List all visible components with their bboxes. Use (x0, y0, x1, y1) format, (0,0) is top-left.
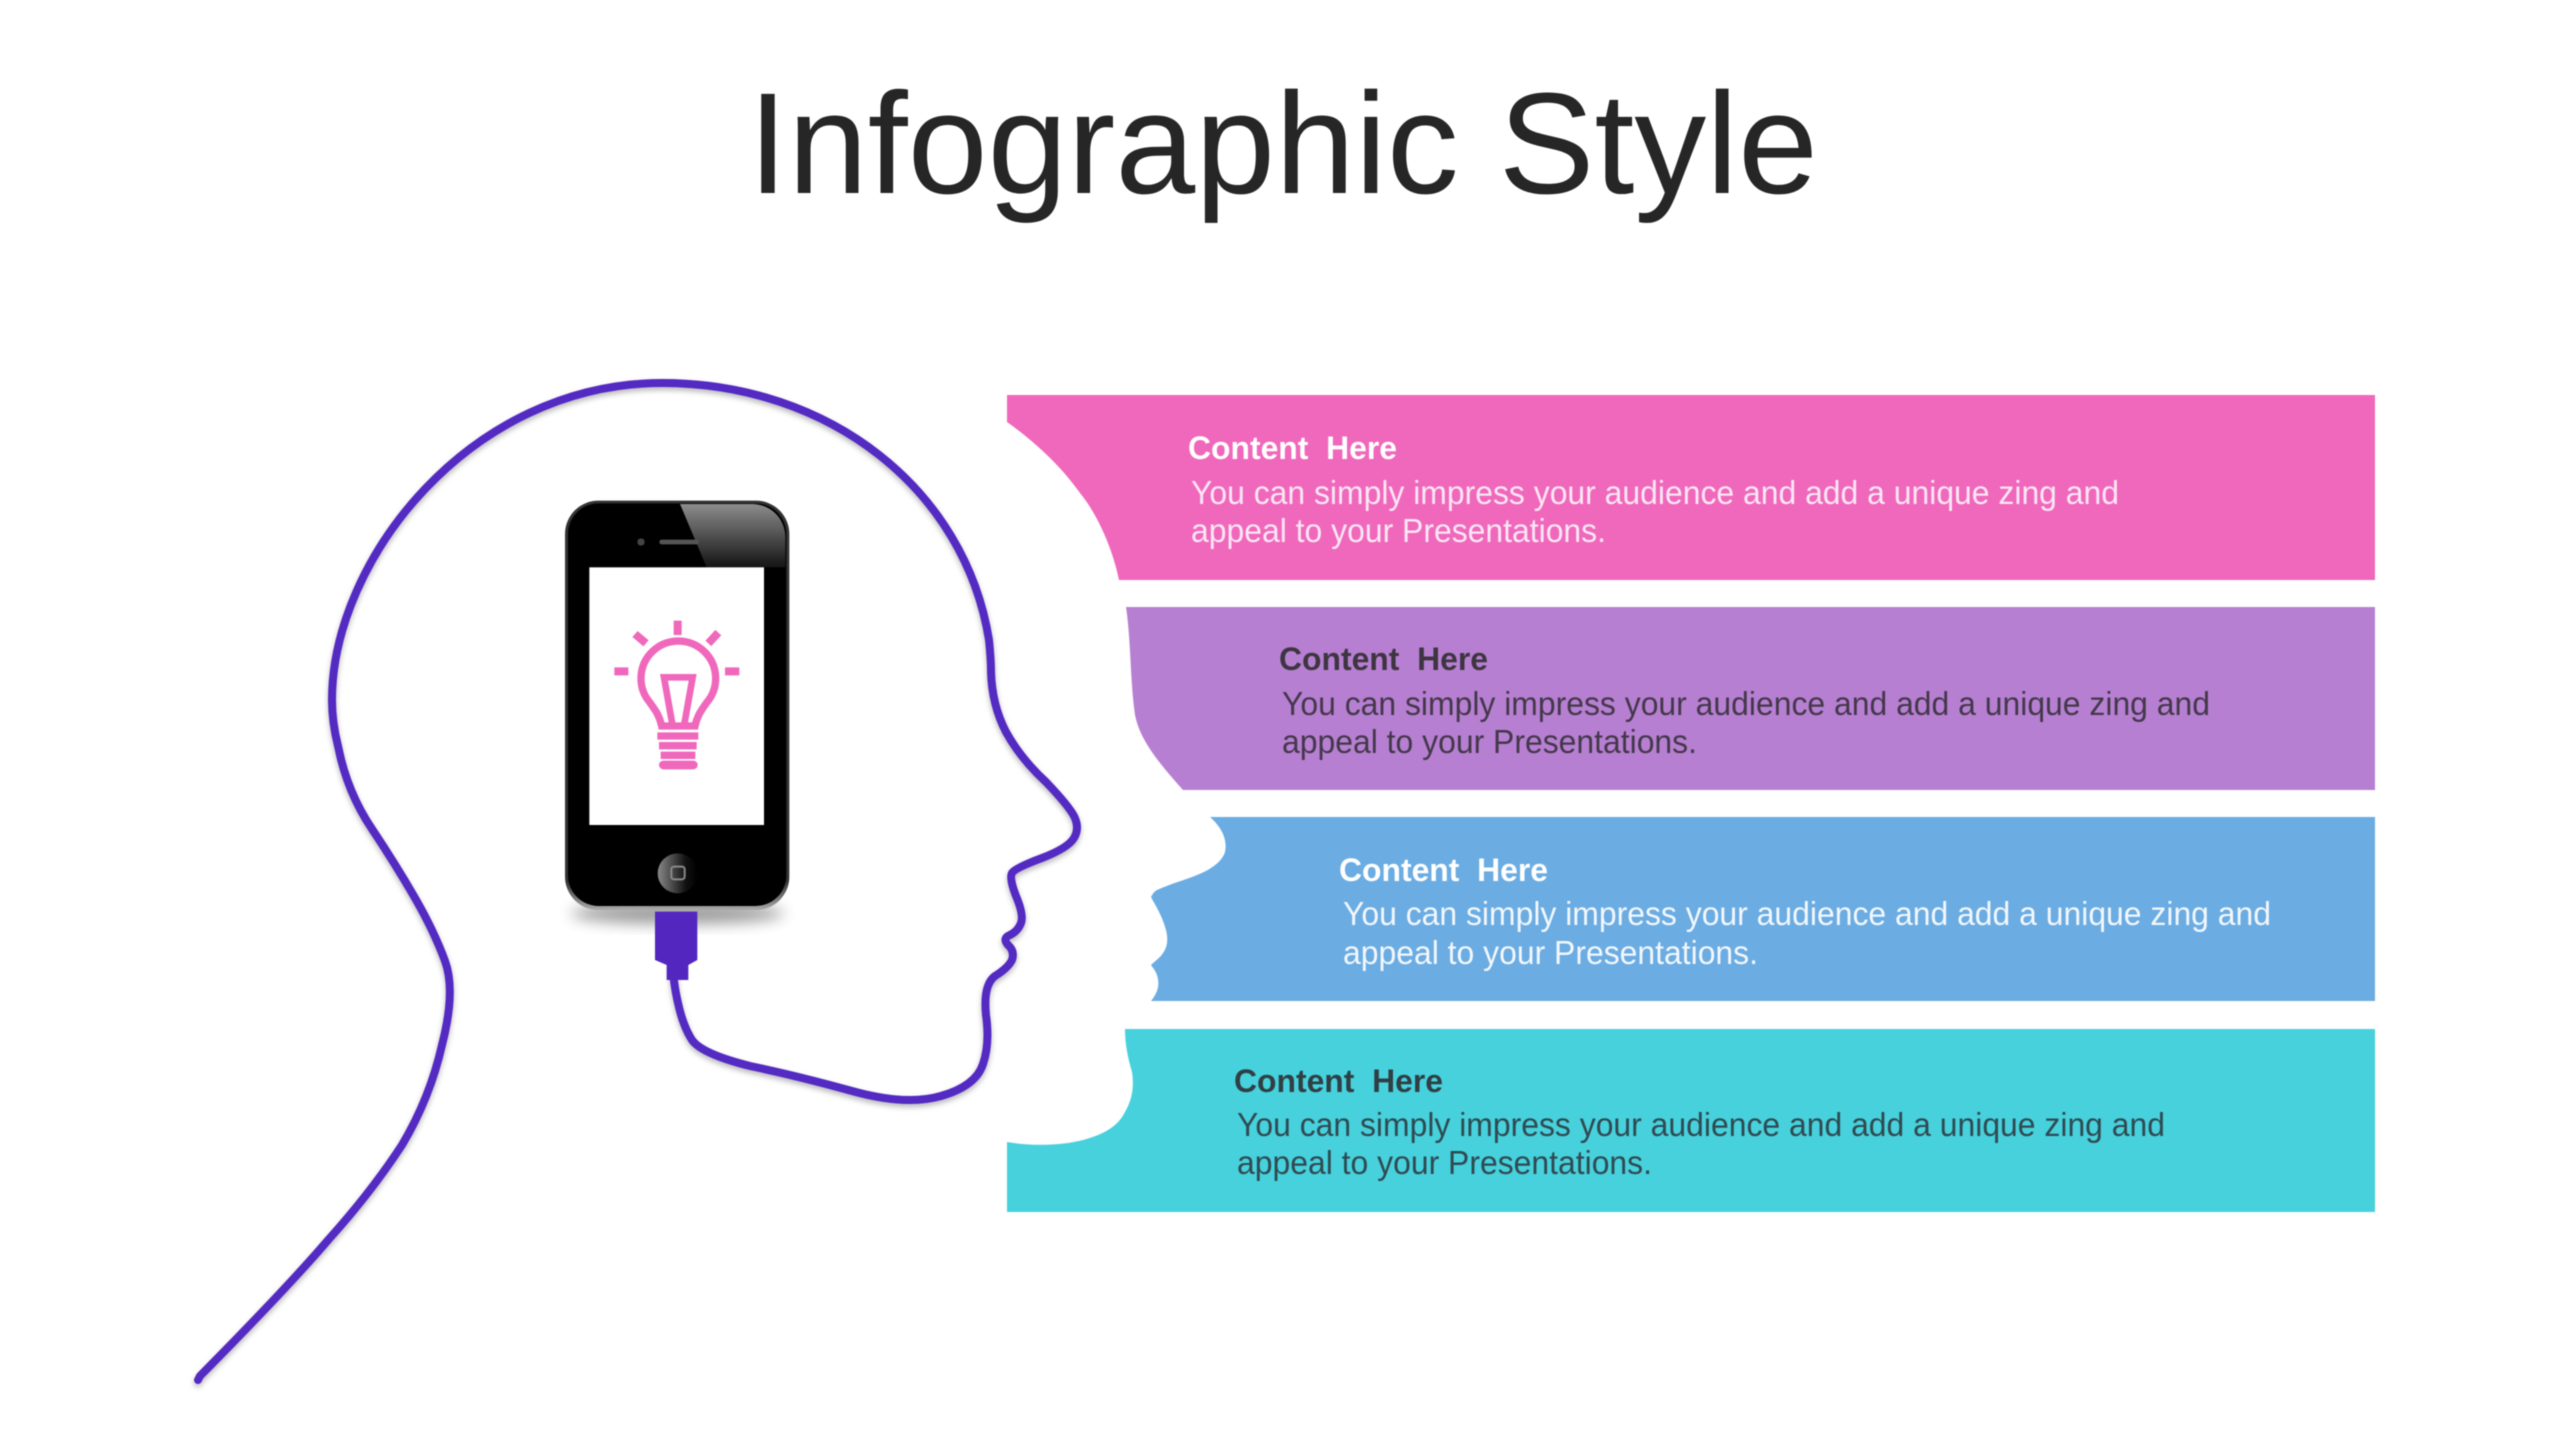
home button (658, 853, 698, 893)
purple band body text: You can simply impress your audience and add a unique zing and (1282, 685, 2210, 722)
title: Infographic Style (748, 63, 1818, 224)
phone glare (680, 504, 785, 567)
blue band shape (1151, 817, 2375, 1001)
icon: light bulb (614, 621, 739, 765)
pink band body text (1191, 474, 2119, 549)
teal band body text (1237, 1106, 2165, 1181)
phone camera and earpiece (637, 538, 697, 546)
panel: purple content band (1126, 607, 2375, 790)
teal band heading: Content Here (1234, 1063, 1443, 1099)
teal band shape (1007, 1029, 2375, 1212)
purple band shape (1126, 607, 2375, 790)
icon: smartphone with light bulb (565, 501, 789, 924)
pink band body text: You can simply impress your audience and add a unique zing and (1191, 474, 2119, 511)
purple band body text (1282, 685, 2210, 760)
phone shadow (571, 903, 784, 924)
pink band heading: Content Here (1188, 430, 1397, 466)
teal band body text: appeal to your Presentations. (1237, 1144, 1652, 1181)
purple band heading: Content Here (1279, 641, 1488, 677)
panel: teal content band (1007, 1029, 2375, 1212)
purple band body text: appeal to your Presentations. (1282, 723, 1697, 760)
cable connector (655, 912, 697, 980)
phone screen (589, 567, 764, 825)
blue band body text (1343, 895, 2271, 971)
panel: blue content band (1151, 817, 2375, 1001)
pink band body text: appeal to your Presentations. (1191, 512, 1606, 549)
blue band heading: Content Here (1339, 852, 1548, 888)
blue band body text: appeal to your Presentations. (1343, 934, 1758, 971)
phone body (565, 501, 789, 910)
blue band body text: You can simply impress your audience and add a unique zing and (1343, 895, 2271, 932)
panel: pink content band (1007, 395, 2375, 580)
teal band body text: You can simply impress your audience and add a unique zing and (1237, 1106, 2165, 1143)
pink band shape (1007, 395, 2375, 580)
head outline cable (198, 383, 1077, 1380)
